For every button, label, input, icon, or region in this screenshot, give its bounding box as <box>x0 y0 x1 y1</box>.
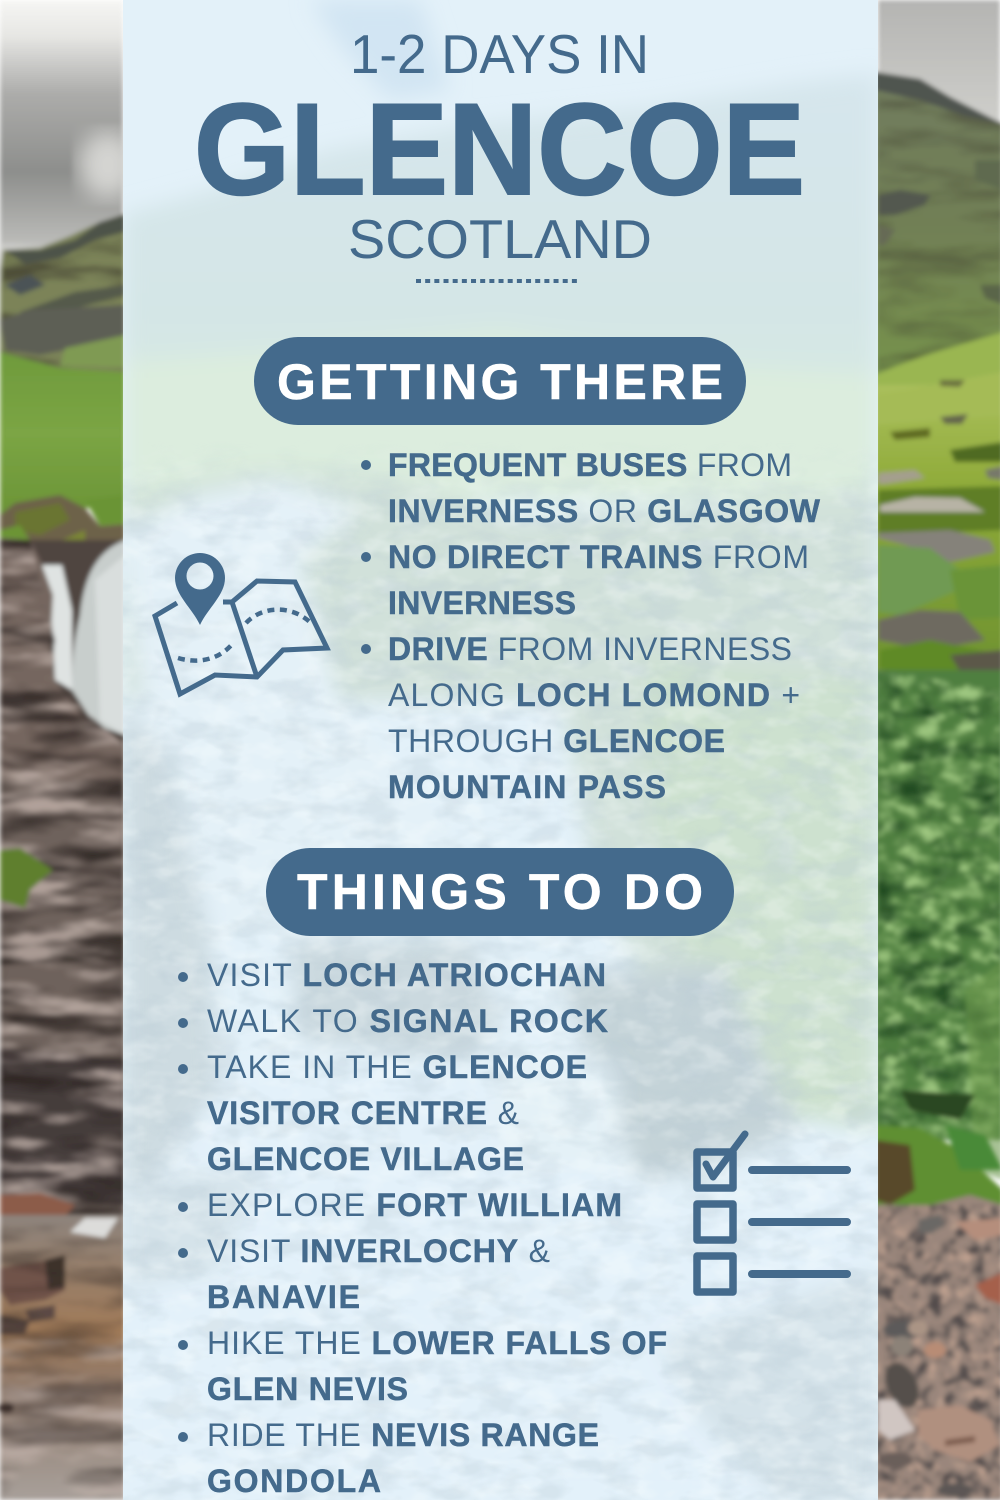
bullet list: getting there: ALONG LOCH LOMOND + <box>388 677 800 713</box>
bullet list: things to do: VISIT LOCH ATRIOCHAN <box>207 957 606 993</box>
icon: map with location pin <box>155 553 327 694</box>
bullet list: getting there: THROUGH GLENCOE <box>388 723 725 759</box>
icon: checklist <box>697 1134 847 1292</box>
bullet list: things to do: RIDE THE NEVIS RANGE <box>207 1417 599 1453</box>
background photo: right strip <box>878 0 1000 1500</box>
bullet list: things to do: HIKE THE LOWER FALLS OF <box>207 1325 667 1361</box>
title line: Scotland: SCOTLAND <box>348 208 652 270</box>
heading pill: getting there <box>254 337 746 425</box>
heading pill: things to do: THINGS TO DO <box>297 864 703 920</box>
title block <box>194 23 805 270</box>
bullet list: things to do: VISITOR CENTRE & <box>207 1095 519 1131</box>
background photo: left strip <box>0 1 123 1500</box>
bullet list: getting there: INVERNESS OR GLASGOW <box>388 493 821 529</box>
heading pill: getting there: GETTING THERE <box>277 354 723 410</box>
bullet list: things to do <box>178 957 667 1499</box>
bullet list: getting there: DRIVE FROM INVERNESS <box>388 631 792 667</box>
bullet list: things to do: EXPLORE FORT WILLIAM <box>207 1187 622 1223</box>
bullet list: getting there: FREQUENT BUSES FROM <box>388 447 792 483</box>
dotted title divider <box>416 279 581 283</box>
title line: 1-2 days in: 1-2 DAYS IN <box>350 23 649 85</box>
bullet list: things to do: BANAVIE <box>207 1279 360 1315</box>
bullet list: getting there <box>361 447 821 805</box>
title: Glencoe: GLENCOE <box>194 76 805 222</box>
bullet list: things to do: GLENCOE VILLAGE <box>207 1141 524 1177</box>
bullet list: things to do: GLEN NEVIS <box>207 1371 408 1407</box>
bullet list: things to do: TAKE IN THE GLENCOE <box>207 1049 587 1085</box>
bullet list: things to do: WALK TO SIGNAL ROCK <box>207 1003 608 1039</box>
bullet list: getting there: INVERNESS <box>388 585 576 621</box>
bullet list: things to do: VISIT INVERLOCHY & <box>207 1233 550 1269</box>
translucent centre panel over the photo <box>123 0 878 1500</box>
heading pill: things to do <box>266 848 734 936</box>
bullet list: getting there: NO DIRECT TRAINS FROM <box>388 539 809 575</box>
bullet list: getting there: MOUNTAIN PASS <box>388 769 666 805</box>
bullet list: things to do: GONDOLA <box>207 1463 381 1499</box>
